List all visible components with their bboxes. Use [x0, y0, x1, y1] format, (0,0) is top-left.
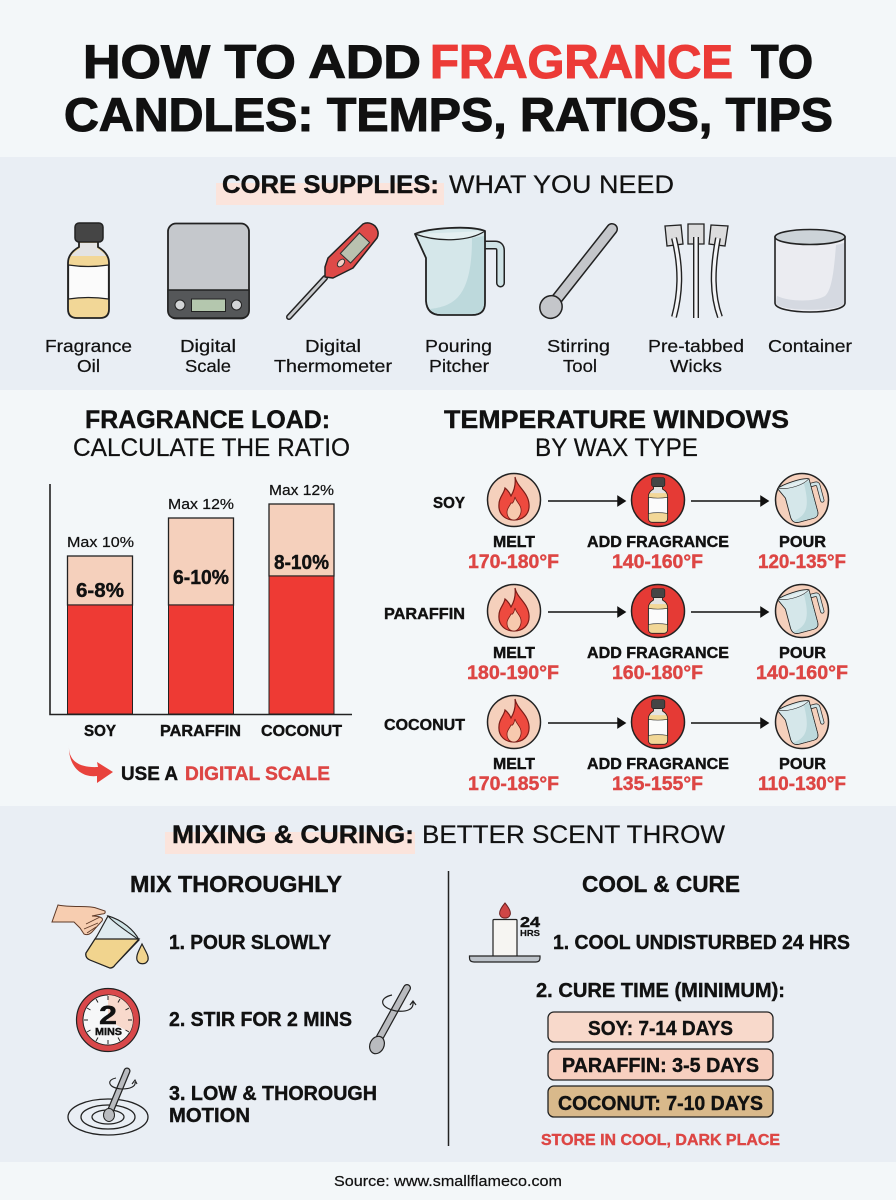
- label: 24 hours: HRS: [520, 928, 540, 938]
- step labels: MELT: [493, 756, 535, 773]
- label: container: Container: [768, 336, 852, 356]
- heading: cool and cure: COOL & CURE: [582, 871, 740, 897]
- title: TO: [751, 35, 813, 88]
- pill: coconut cure time: COCONUT: 7-10 DAYS: [558, 1093, 763, 1115]
- label: fragrance oil: Oil: [77, 356, 100, 376]
- temperatures: [467, 663, 848, 684]
- heading: mixing and curing: [172, 821, 725, 849]
- label: stirring tool: Stirring: [547, 336, 610, 356]
- bar: paraffin: Max 12%: [168, 496, 234, 513]
- label: pre-tabbed wicks: Wicks: [670, 356, 722, 376]
- label: pouring pitcher: Pouring: [425, 336, 492, 356]
- title: [64, 35, 833, 141]
- step labels: ADD FRAGRANCE: [587, 645, 729, 662]
- callout: use a digital scale: USE A: [121, 764, 178, 785]
- bar: paraffin: [168, 496, 234, 714]
- step labels: MELT: [493, 534, 535, 551]
- icon: pre-tabbed wicks: [665, 224, 728, 318]
- icon: two minute timer: [76, 988, 140, 1052]
- flow: soy temperatures: [433, 474, 846, 573]
- step: pour slowly: 1. POUR SLOWLY: [169, 932, 332, 954]
- heading: mix thoroughly: MIX THOROUGHLY: [130, 871, 342, 897]
- icon: melt: [488, 696, 540, 748]
- temperatures: [468, 774, 846, 795]
- arrow: [548, 496, 625, 506]
- icon: digital thermometer: [289, 223, 378, 317]
- heading highlight: [165, 832, 415, 854]
- step labels: POUR: [779, 756, 826, 773]
- heading: fragrance load: [73, 406, 350, 462]
- arrow: [691, 496, 768, 506]
- panel: core supplies: [0, 157, 896, 390]
- temperatures: 160-180°F: [612, 663, 703, 684]
- category labels: PARAFFIN: [160, 723, 241, 740]
- temperatures: 140-160°F: [612, 552, 703, 573]
- label: fragrance oil: Fragrance: [45, 336, 132, 356]
- icon: melt: [488, 584, 540, 638]
- step labels: ADD FRAGRANCE: [587, 534, 729, 551]
- icon: pour: [776, 474, 828, 526]
- icon: hand pouring pitcher: [52, 905, 148, 968]
- heading: temperature windows: [444, 406, 789, 462]
- title: FRAGRANCE: [430, 35, 733, 88]
- label: digital scale: Digital: [180, 336, 236, 356]
- pill: soy cure time: [548, 1012, 773, 1042]
- step: low and thorough motion: MOTION: [169, 1105, 250, 1127]
- icon: stirring motion: [68, 1071, 148, 1135]
- label: digital thermometer: Digital: [305, 336, 361, 356]
- bar chart: fragrance load: [50, 482, 352, 740]
- flow: paraffin temperatures: [384, 584, 848, 684]
- icon: melt: [488, 474, 540, 526]
- heading: mixing and curing: MIXING & CURING:: [172, 821, 414, 849]
- temperatures: 110-130°F: [758, 774, 846, 795]
- icon: candle: [470, 903, 540, 962]
- step labels: [493, 645, 826, 662]
- step: stir for two minutes: 2. STIR FOR 2 MINS: [169, 1009, 352, 1031]
- heading: temperature windows: TEMPERATURE WINDOWS: [444, 406, 789, 434]
- temperatures: 135-155°F: [612, 774, 703, 795]
- icon: container: [775, 230, 845, 312]
- flow: coconut temperatures: COCONUT: [384, 717, 465, 734]
- step labels: POUR: [779, 534, 826, 551]
- heading: core supplies: [222, 171, 674, 199]
- temperatures: 170-185°F: [468, 774, 559, 795]
- label: pouring pitcher: Pitcher: [429, 356, 489, 376]
- category labels: SOY: [84, 723, 116, 740]
- icon: stirring tool: [535, 229, 612, 323]
- step: cure time: 2. CURE TIME (MINIMUM):: [536, 980, 785, 1002]
- label: digital thermometer: [274, 336, 392, 376]
- icon: pour: [776, 696, 828, 748]
- step: low and thorough motion: [169, 1083, 377, 1127]
- step labels: [493, 756, 826, 773]
- flow: soy temperatures: SOY: [433, 495, 465, 512]
- heading: core supplies: CORE SUPPLIES:: [222, 171, 439, 199]
- heading: core supplies: WHAT YOU NEED: [449, 171, 674, 199]
- icon: add fragrance: [632, 584, 684, 638]
- category labels: COCONUT: [261, 723, 342, 740]
- bar: coconut: [269, 482, 334, 714]
- icon: two minute timer: 2: [99, 1000, 117, 1030]
- label: digital scale: Scale: [185, 356, 231, 376]
- temperatures: 120-135°F: [758, 552, 846, 573]
- label: pouring pitcher: [425, 336, 492, 376]
- pill: paraffin cure time: PARAFFIN: 3-5 DAYS: [562, 1055, 759, 1077]
- temperatures: 170-180°F: [468, 552, 559, 573]
- icon: fragrance oil bottle: [68, 223, 109, 318]
- icon: stirring spoon: [367, 988, 416, 1056]
- label: pre-tabbed wicks: [648, 336, 744, 376]
- temperatures: [468, 552, 846, 573]
- icon: two minute timer: MINS: [95, 1027, 122, 1038]
- bar: coconut: Max 12%: [269, 482, 334, 499]
- icon: digital scale: [168, 224, 249, 318]
- bar: soy: [67, 534, 134, 714]
- heading: fragrance load: CALCULATE THE RATIO: [73, 434, 350, 462]
- step: low and thorough motion: 3. LOW & THOROUGH: [169, 1083, 377, 1105]
- bar: paraffin: 6-10%: [173, 567, 229, 589]
- flow: paraffin temperatures: PARAFFIN: [384, 606, 465, 623]
- label: pre-tabbed wicks: Pre-tabbed: [648, 336, 744, 356]
- label: 24 hours: 24: [520, 914, 541, 931]
- label: fragrance oil: [45, 336, 132, 376]
- callout: use a digital scale: DIGITAL SCALE: [185, 764, 330, 785]
- icon: pouring pitcher: [415, 228, 500, 315]
- label: digital thermometer: Thermometer: [274, 356, 392, 376]
- bar: soy: Max 10%: [67, 534, 134, 551]
- arrow: [548, 608, 625, 616]
- callout: use a digital scale: [69, 745, 330, 785]
- arrow: [548, 718, 625, 728]
- panel: mixing and curing: [0, 806, 896, 1162]
- label: stirring tool: [547, 336, 610, 376]
- source: Source: www.smallflameco.com: [334, 1173, 562, 1190]
- step labels: MELT: [493, 645, 535, 662]
- category labels: [84, 723, 342, 740]
- note: storage: STORE IN COOL, DARK PLACE: [541, 1132, 780, 1149]
- pill: soy cure time: SOY: 7-14 DAYS: [588, 1018, 733, 1040]
- heading highlight: [216, 183, 444, 205]
- label: 24 hours: [520, 914, 541, 938]
- arrow: [691, 718, 768, 728]
- icon: add fragrance: [632, 696, 684, 748]
- temperatures: 180-190°F: [467, 663, 559, 684]
- bar: soy: 6-8%: [76, 580, 124, 602]
- pill: paraffin cure time: [548, 1049, 773, 1080]
- heading: mixing and curing: BETTER SCENT THROW: [422, 821, 725, 849]
- title: CANDLES: TEMPS, RATIOS, TIPS: [64, 88, 833, 141]
- bar: coconut: 8-10%: [274, 552, 329, 574]
- step labels: ADD FRAGRANCE: [587, 756, 729, 773]
- label: digital scale: [180, 336, 236, 376]
- step: cool undisturbed: 1. COOL UNDISTURBED 24 HRS: [553, 932, 850, 954]
- icon: pour: [776, 584, 828, 638]
- pill: coconut cure time: [548, 1086, 773, 1117]
- icon: add fragrance: [632, 474, 684, 526]
- temperatures: 140-160°F: [756, 663, 848, 684]
- heading: fragrance load: FRAGRANCE LOAD:: [85, 406, 330, 434]
- heading: temperature windows: BY WAX TYPE: [535, 434, 698, 462]
- label: stirring tool: Tool: [563, 356, 597, 376]
- arrow: [691, 608, 768, 616]
- arrow: curved red: [69, 745, 113, 783]
- title: HOW TO ADD: [83, 35, 421, 88]
- axes: [50, 484, 352, 714]
- flow: coconut temperatures: [384, 696, 846, 795]
- step labels: POUR: [779, 645, 826, 662]
- step labels: [493, 534, 826, 551]
